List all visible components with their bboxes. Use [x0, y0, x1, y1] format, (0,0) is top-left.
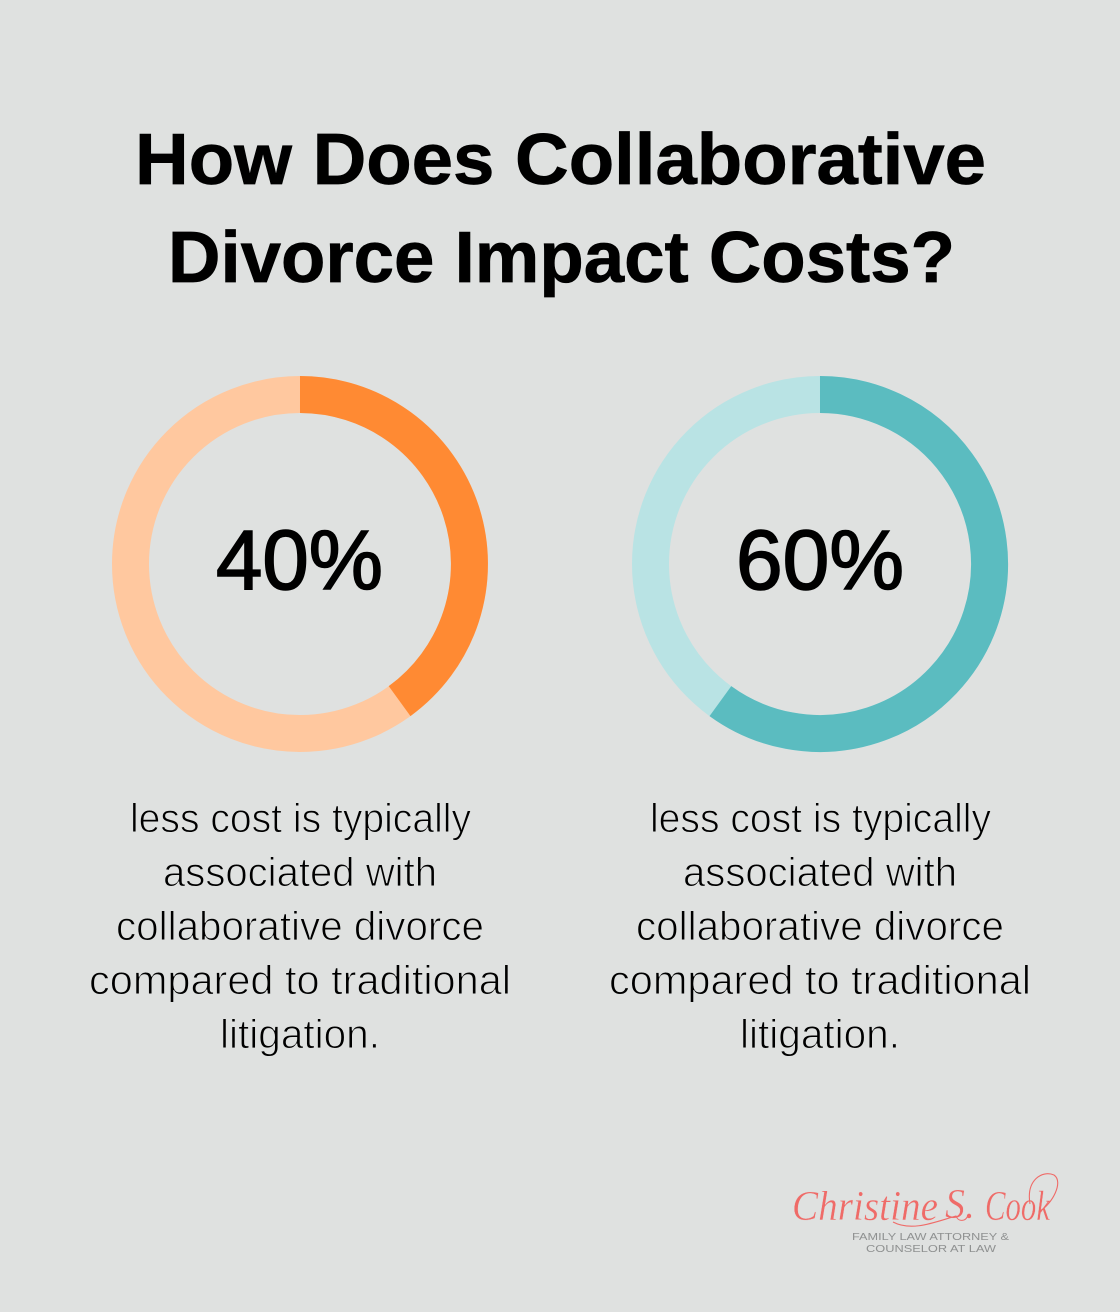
- panel: 60% statistic: [609, 394, 1031, 1057]
- description: 40%: compared to traditional: [89, 957, 511, 1003]
- title: [135, 120, 986, 298]
- description: 40%: associated with: [163, 849, 437, 895]
- description: 40%: less cost is typically: [130, 795, 471, 841]
- logo: Christine S. Cook: COUNSELOR AT LAW: [866, 1243, 996, 1255]
- description: 60%: collaborative divorce: [636, 903, 1004, 949]
- donut chart: 40%: [130, 394, 470, 734]
- value: 40%: 40%: [216, 513, 383, 607]
- logo: Christine S. Cook: Christine: [792, 1184, 938, 1230]
- value: 60%: 60%: [736, 513, 904, 607]
- logo: Christine S. Cook: [792, 1174, 1058, 1255]
- description: 40%: [89, 795, 511, 1057]
- logo: Christine S. Cook: S.: [945, 1182, 975, 1228]
- title: Divorce Impact Costs?: [168, 218, 955, 298]
- description: 40%: collaborative divorce: [116, 903, 484, 949]
- description: 60%: [609, 795, 1031, 1057]
- title: How Does Collaborative: [135, 120, 986, 200]
- logo: Christine S. Cook: Cook: [985, 1184, 1051, 1230]
- description: 60%: compared to traditional: [609, 957, 1031, 1003]
- description: 60%: litigation.: [740, 1011, 900, 1057]
- description: 40%: litigation.: [220, 1011, 380, 1057]
- panel: 40% statistic: [89, 394, 511, 1057]
- description: 60%: associated with: [683, 849, 957, 895]
- description: 60%: less cost is typically: [650, 795, 991, 841]
- donut chart: 60%: [650, 394, 990, 734]
- logo: Christine S. Cook: FAMILY LAW ATTORNEY &: [852, 1231, 1009, 1243]
